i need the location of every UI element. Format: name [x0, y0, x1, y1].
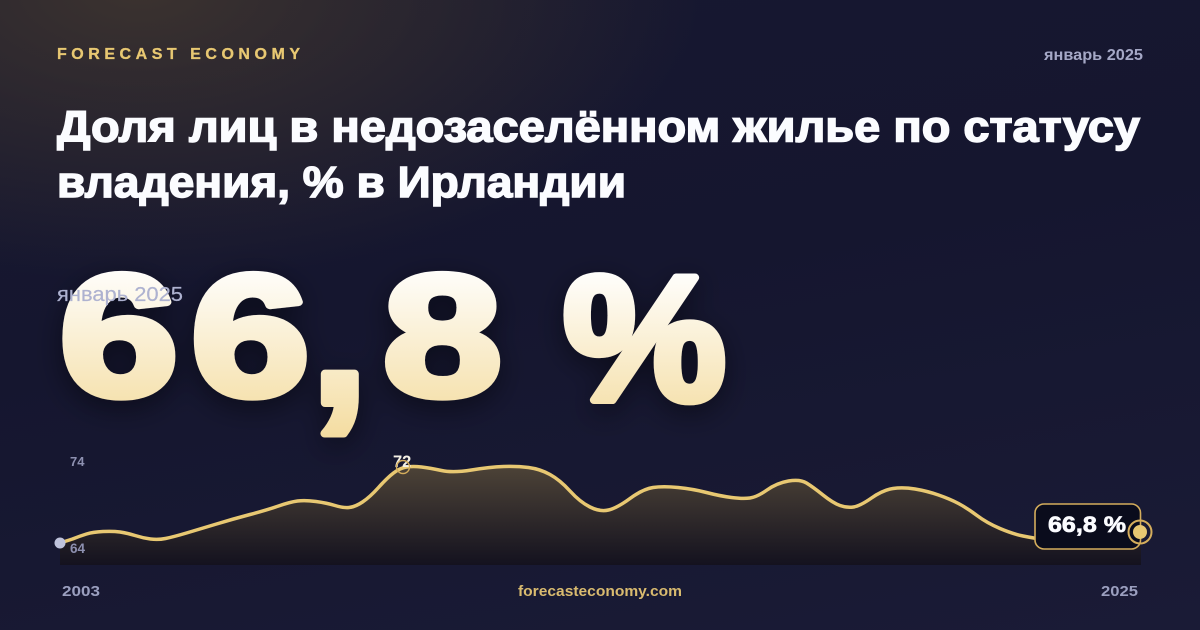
big value: 8 — [383, 241, 502, 432]
start point marker — [54, 538, 66, 548]
peak marker and label: 72 — [393, 453, 411, 471]
callout: latest value: 66,8 % — [1048, 512, 1126, 537]
big value: 6 — [191, 241, 310, 432]
axis min label: 64 — [70, 541, 86, 556]
title — [57, 102, 1141, 207]
x axis end year: 2025 — [1101, 583, 1138, 600]
title: Доля лиц в недозаселённом жилье по статусу — [57, 102, 1141, 152]
axis max label: 74 — [70, 454, 85, 469]
x axis start year: 2003 — [62, 583, 100, 600]
big value: , — [310, 225, 369, 446]
big value: 6 — [60, 241, 178, 432]
end point marker — [1128, 520, 1152, 544]
date top right: январь 2025 — [1044, 47, 1143, 64]
big value — [60, 225, 726, 446]
big value: % — [563, 239, 726, 438]
callout: latest value — [1035, 504, 1140, 549]
brand label: FORECAST ECONOMY — [57, 46, 300, 63]
chart: area and line — [60, 466, 1141, 565]
area fill — [60, 466, 1141, 565]
value line — [60, 466, 1046, 543]
title: владения, % в Ирландии — [57, 158, 626, 207]
date overlay: январь 2025 — [57, 284, 183, 306]
source url: forecasteconomy.com — [518, 584, 682, 600]
